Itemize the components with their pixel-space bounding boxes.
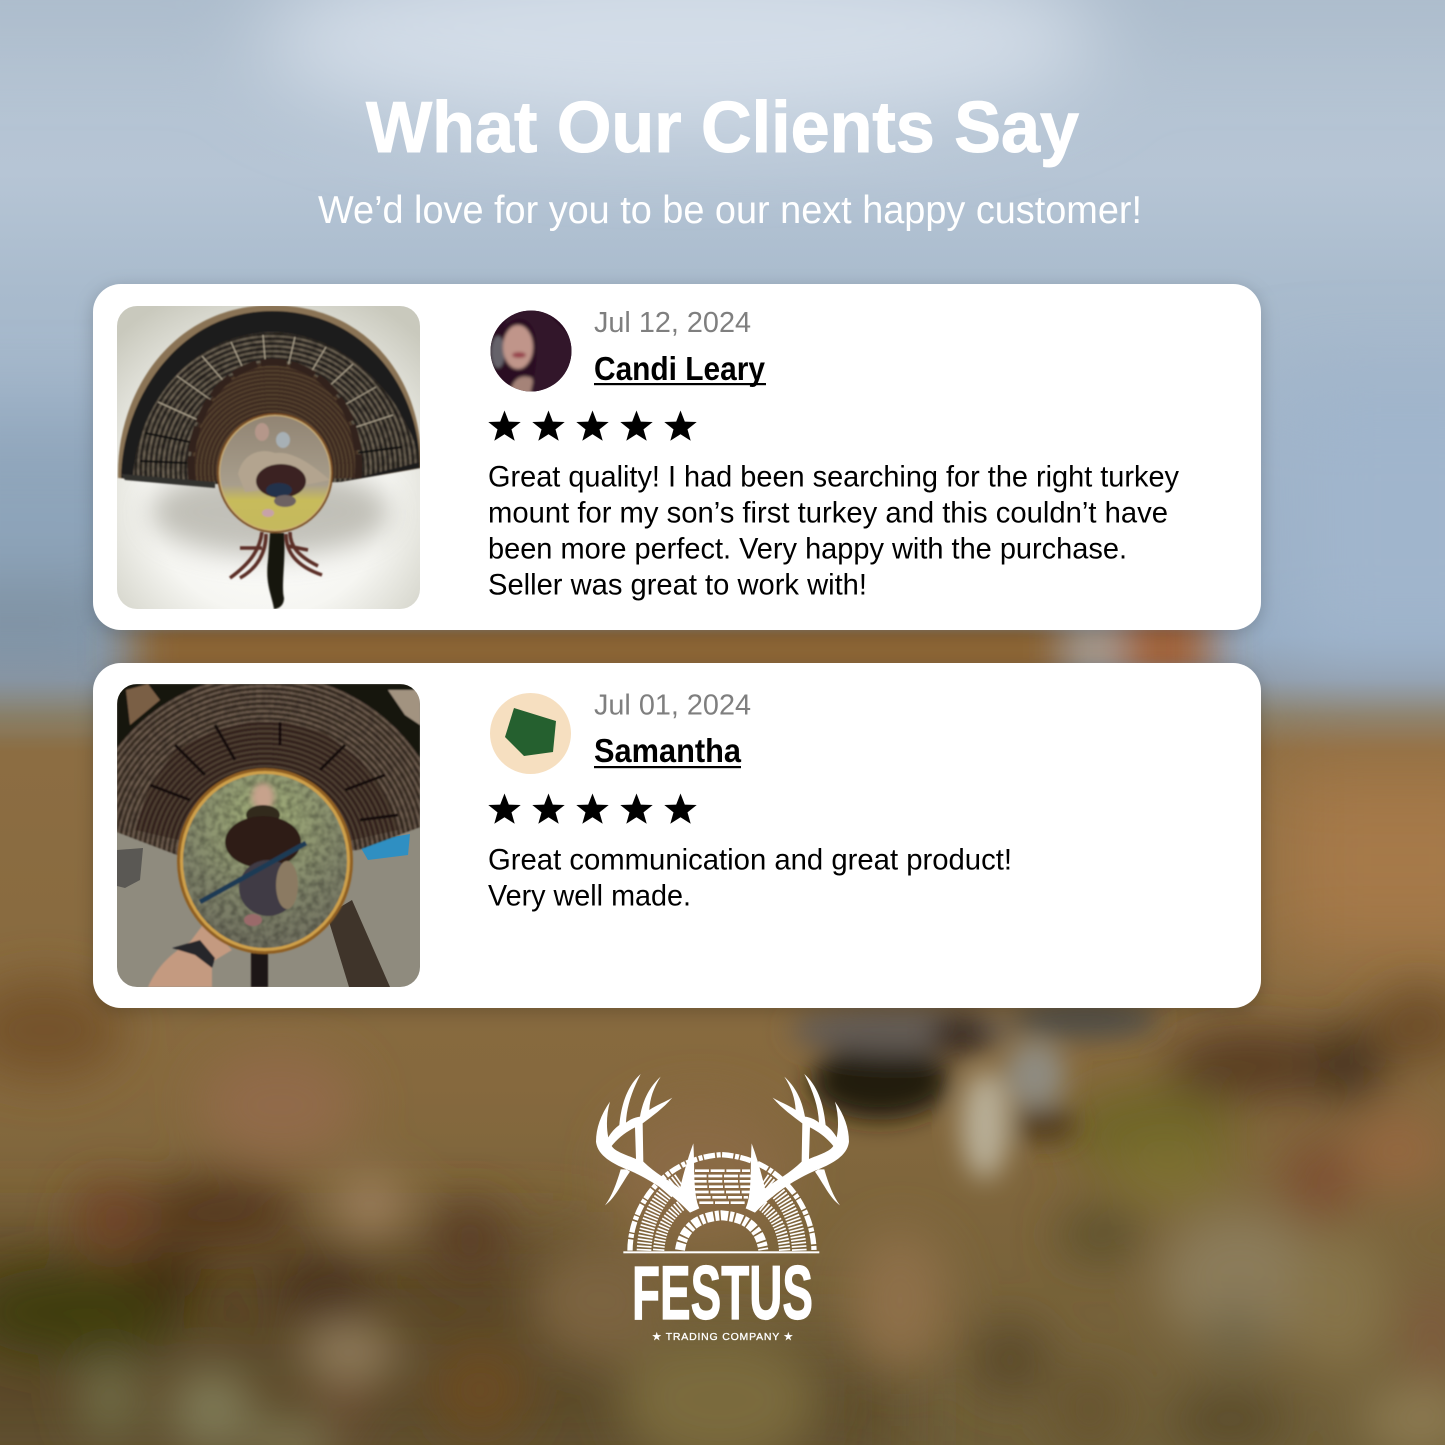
reviewer name: Candi Leary	[594, 350, 766, 387]
icon: antlers and turkey fan	[596, 1074, 849, 1253]
review text: Great quality! I had been searching for the right turkey	[488, 460, 1179, 494]
reviewer name: Samantha	[594, 732, 742, 769]
review text	[488, 844, 1012, 912]
review text: Great communication and great product!	[488, 844, 1012, 876]
title: What Our Clients Say	[366, 88, 1079, 168]
avatar: Samantha	[490, 693, 571, 774]
photo disk	[177, 768, 353, 954]
photo disk	[217, 413, 333, 533]
logo: Festus Trading Company	[596, 1074, 849, 1343]
wordmark: FESTUS	[632, 1251, 813, 1336]
distant hillside band between the cards	[130, 624, 1210, 672]
feet and beard	[230, 532, 322, 578]
review text: Seller was great to work with!	[488, 568, 867, 602]
review text: been more perfect. Very happy with the purchase.	[488, 532, 1127, 566]
review text: Very well made.	[488, 880, 691, 912]
review text	[488, 460, 1179, 602]
panel: review card Candi Leary	[93, 284, 1261, 630]
panel: review card Samantha	[79, 663, 1261, 1046]
review text: mount for my son’s first turkey and this couldn’t have	[488, 496, 1168, 530]
hand and beard	[148, 922, 232, 987]
date: Jul 12, 2024	[594, 307, 751, 339]
tagline: ★ TRADING COMPANY ★	[652, 1331, 794, 1343]
antlers	[596, 1074, 699, 1213]
photo: turkey fan mount on wall	[117, 305, 421, 609]
star rating	[488, 794, 697, 824]
star rating	[488, 410, 697, 441]
avatar: Candi Leary	[490, 310, 572, 392]
photo: turkey fan held over concrete floor	[117, 684, 420, 987]
date: Jul 01, 2024	[594, 690, 751, 722]
turkey fan	[630, 1155, 814, 1251]
subtitle: We’d love for you to be our next happy customer!	[318, 189, 1142, 232]
